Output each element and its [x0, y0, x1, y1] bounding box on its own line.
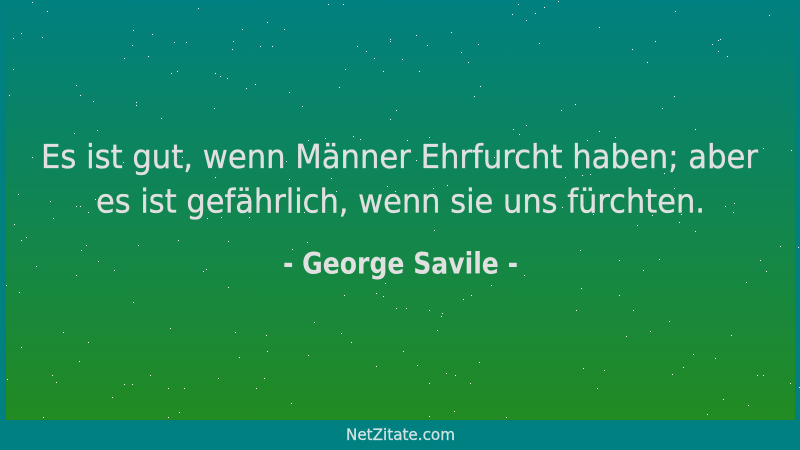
footer site name: NetZitate.com: [346, 425, 455, 444]
quote text: [41, 137, 758, 220]
author attribution: - George Savile -: [283, 246, 518, 280]
quote line 1: Es ist gut, wenn Männer Ehrfurcht haben; aber: [41, 137, 758, 176]
quote line 2: es ist gefährlich, wenn sie uns fürchten.: [96, 182, 705, 220]
